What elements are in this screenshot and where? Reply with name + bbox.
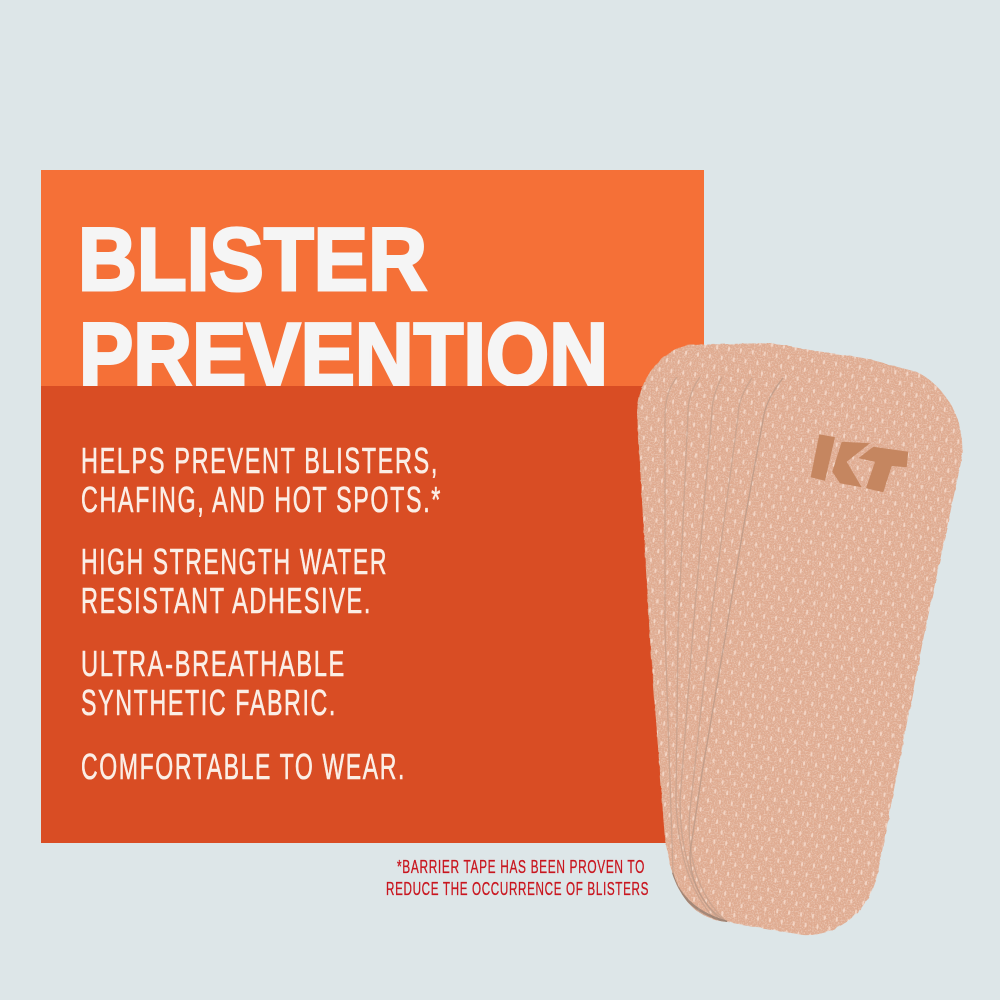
benefit: adhesive: RESISTANT ADHESIVE.: [81, 580, 372, 621]
benefit: prevents blisters: HELPS PREVENT BLISTERS,: [81, 440, 439, 481]
footnote: REDUCE THE OCCURRENCE OF BLISTERS: [386, 879, 649, 899]
panel: orange heading panel: [41, 170, 704, 404]
benefit: prevents blisters: CHAFING, AND HOT SPOTS.*: [81, 479, 442, 520]
heading: blister: BLISTER: [78, 209, 427, 309]
benefit: adhesive: HIGH STRENGTH WATER: [81, 541, 388, 582]
footnote: [386, 857, 649, 899]
benefit: breathable fabric: ULTRA-BREATHABLE: [81, 643, 346, 684]
benefit: breathable fabric: [81, 643, 346, 723]
heading: prevention: PREVENTION: [79, 304, 608, 404]
panel: red benefits panel: [41, 386, 681, 843]
logo: KT: [811, 434, 908, 492]
benefit: breathable fabric: SYNTHETIC FABRIC.: [81, 682, 337, 723]
benefit: adhesive: [81, 541, 388, 621]
product: stack of KT blister tape strips: [630, 335, 970, 945]
benefit: prevents blisters: [81, 440, 442, 520]
footnote: *BARRIER TAPE HAS BEEN PROVEN TO: [397, 857, 645, 877]
benefit: comfort: COMFORTABLE TO WEAR.: [81, 746, 406, 787]
